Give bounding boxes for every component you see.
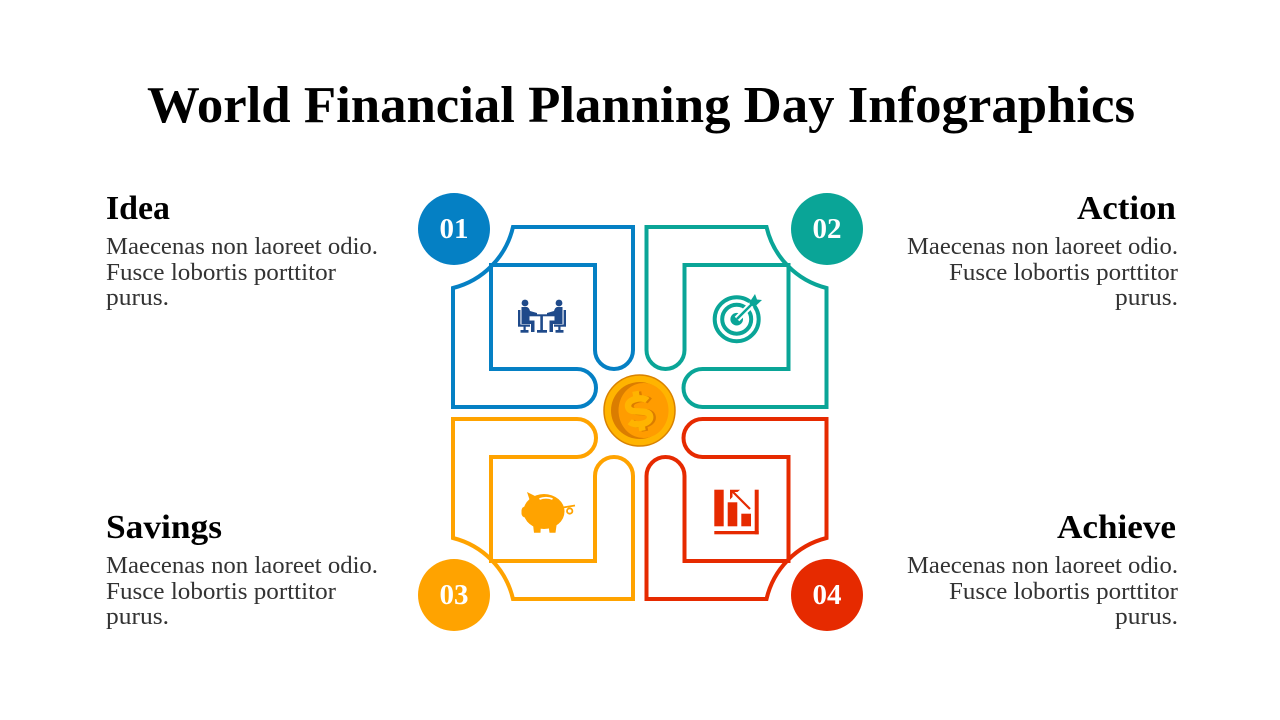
panel: idea text xyxy=(106,190,378,311)
text block: achieve: Fusce lobortis porttitor xyxy=(949,579,1178,605)
panel: red quadrant outline xyxy=(646,419,826,599)
title: World Financial Planning Day Infographics xyxy=(147,77,1135,134)
panel: achieve text xyxy=(907,509,1178,630)
badge: 03 xyxy=(418,559,490,631)
panel: savings text xyxy=(106,509,378,630)
icon: piggy bank xyxy=(522,492,575,533)
text block: idea: Fusce lobortis porttitor xyxy=(106,260,336,286)
text block: achieve: Maecenas non laoreet odio. xyxy=(907,553,1178,579)
text block: idea: purus. xyxy=(106,285,169,311)
text block: idea: Maecenas non laoreet odio. xyxy=(106,234,378,260)
text block: action: Fusce lobortis porttitor xyxy=(949,260,1178,286)
text block: action: Maecenas non laoreet odio. xyxy=(907,234,1178,260)
icon: people at a table xyxy=(518,300,566,333)
icon: dollar coin xyxy=(604,375,675,446)
panel: action text xyxy=(907,190,1178,311)
icon: target with arrow xyxy=(715,294,762,341)
panel: teal quadrant outline xyxy=(646,227,826,407)
text block: savings: purus. xyxy=(106,604,169,630)
badge: 03: 03 xyxy=(440,579,468,611)
text block: savings xyxy=(106,553,378,630)
heading: savings: Savings xyxy=(106,509,222,546)
text block: action xyxy=(907,234,1178,311)
badge: 04: 04 xyxy=(812,579,842,611)
badge: 02 xyxy=(791,193,863,265)
text block: achieve xyxy=(907,553,1178,630)
text block: achieve: purus. xyxy=(1115,604,1178,630)
text block: savings: Maecenas non laoreet odio. xyxy=(106,553,378,579)
badge: 04 xyxy=(791,559,863,631)
panel: blue quadrant outline xyxy=(453,227,633,407)
heading: idea: Idea xyxy=(106,190,170,227)
badge: 02: 02 xyxy=(812,213,842,245)
text block: idea xyxy=(106,234,378,311)
badge: 01: 01 xyxy=(440,213,468,245)
panel: orange quadrant outline xyxy=(453,419,633,599)
heading: action: Action xyxy=(1077,190,1176,227)
text block: savings: Fusce lobortis porttitor xyxy=(106,579,336,605)
heading: achieve: Achieve xyxy=(1057,509,1176,546)
text block: action: purus. xyxy=(1115,285,1178,311)
badge: 01 xyxy=(418,193,490,265)
icon: bar chart with arrow xyxy=(714,490,759,534)
